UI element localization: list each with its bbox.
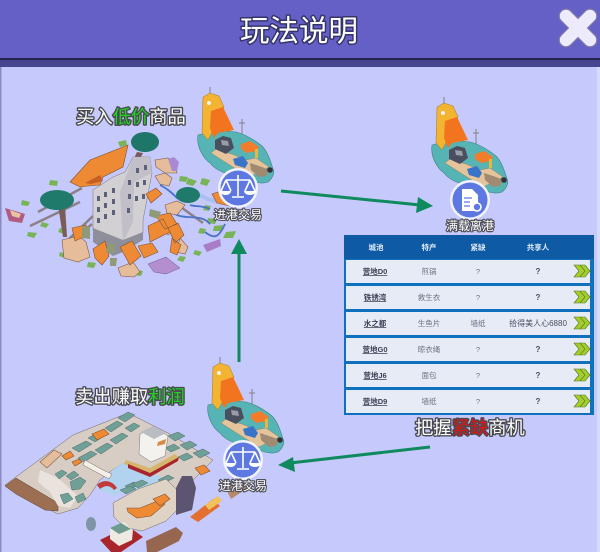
row 3 [346, 312, 590, 335]
table: city listing [344, 235, 594, 415]
row 5 [346, 364, 590, 387]
row 1: 营地D0 [363, 266, 387, 276]
table header: 特产 [422, 242, 437, 252]
west wall [5, 478, 58, 511]
table header: 共享人 [527, 242, 550, 252]
table header: 城池 [368, 242, 384, 252]
heading: sell for profit: 卖出赚取利润 [75, 386, 185, 407]
icon: trade badge bottom [223, 440, 263, 480]
white tower [139, 427, 168, 462]
row 4 [346, 338, 590, 361]
label: enter port top: 进港交易 [214, 207, 262, 222]
north ring [5, 413, 213, 514]
tree [40, 190, 74, 210]
arrow: up to buy [231, 239, 247, 362]
row 1: ? [536, 267, 541, 276]
row 2: 铁锈湾 [364, 292, 387, 302]
heading: buy low: 买入低价商品 [76, 106, 186, 127]
label: full load departure: 满载离港 [446, 218, 494, 233]
row 4: 营地G0 [362, 344, 388, 354]
row 1: ? [476, 267, 480, 276]
heading: seize shortage: 把握紧缺商机 [415, 417, 525, 438]
title: 玩法说明 [240, 15, 358, 48]
icon: ship bottom [208, 357, 284, 453]
row 1: 煎锅 [422, 266, 437, 276]
row 4: ? [476, 345, 480, 354]
table header [344, 235, 594, 259]
row 6: 营地D9 [363, 396, 387, 406]
arrow: to sell [278, 447, 430, 472]
row 2: 救生衣 [418, 292, 441, 302]
row 6: ? [536, 397, 541, 406]
icon: ship top left [198, 87, 274, 183]
greenery [21, 140, 236, 276]
harbor water [98, 461, 164, 496]
beams [30, 188, 203, 240]
row 6: ? [476, 397, 480, 406]
row 2: ? [476, 293, 480, 302]
row 5: 面包 [422, 370, 437, 380]
row 3: 拾得美人心6880 [509, 318, 567, 328]
row 5: 营地J6 [363, 370, 387, 380]
row 6 [346, 390, 590, 413]
rubble roofs [62, 201, 188, 277]
icon: departure badge [450, 180, 490, 220]
row 5: ? [536, 371, 541, 380]
arrow: to departure [281, 191, 433, 213]
label: enter port bottom: 进港交易 [219, 478, 267, 493]
row 3: 墙纸 [470, 318, 486, 328]
row 3: 生鱼片 [418, 318, 440, 328]
row 4: ? [536, 345, 541, 354]
icon: trade badge top [218, 168, 258, 208]
rooftops [72, 412, 210, 495]
row 2: ? [536, 293, 541, 302]
row 5: ? [476, 371, 480, 380]
icon: close button [566, 16, 590, 40]
island: walled harbor [5, 412, 249, 552]
row 3: 水之都 [364, 318, 387, 328]
south block [113, 479, 188, 531]
boat [5, 208, 25, 223]
row 6: 墙纸 [422, 396, 437, 406]
icon: ship top right [432, 97, 508, 193]
island: slum market [5, 132, 236, 277]
row 2 [346, 286, 590, 309]
row 1 [346, 260, 590, 283]
row 4: 晾衣绳 [418, 344, 441, 354]
table header: 紧缺 [470, 242, 486, 252]
